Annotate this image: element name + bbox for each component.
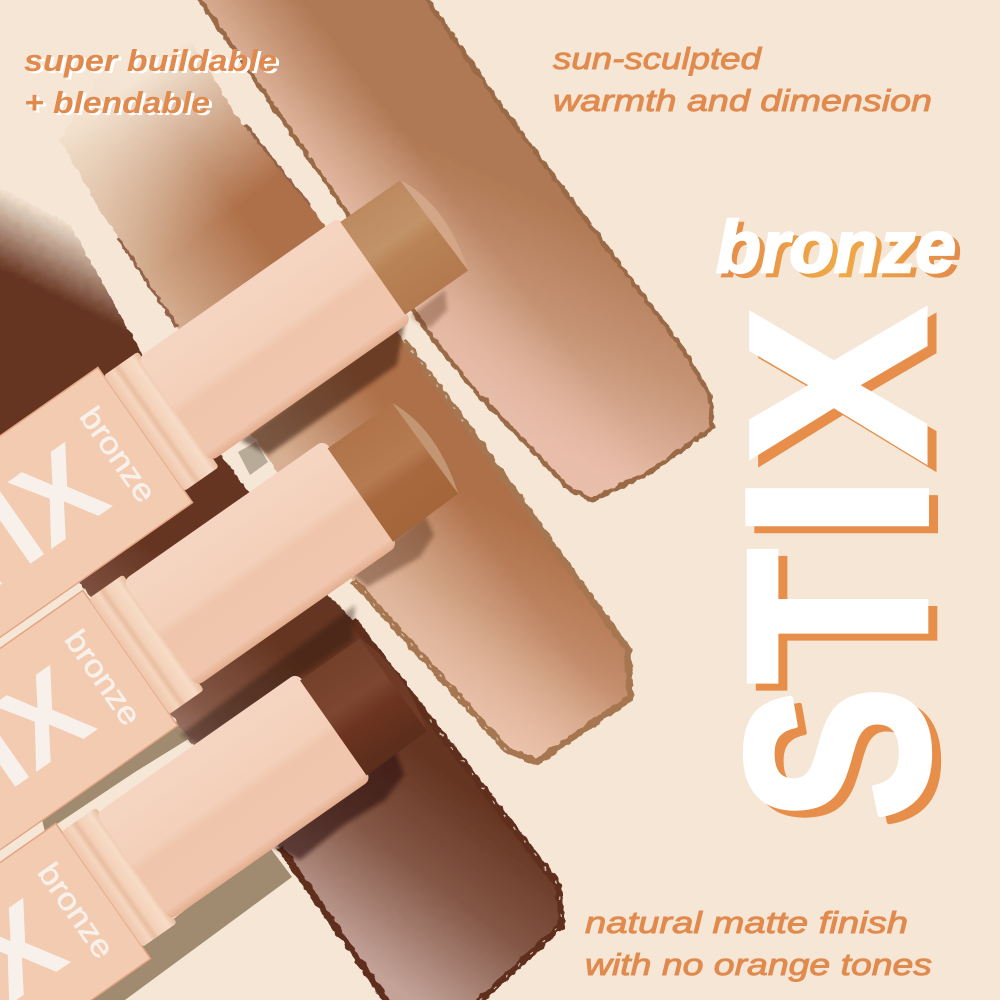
collar (104, 352, 219, 491)
caption: super buildable + blendable: super buildable (27, 45, 280, 80)
heading: STIX vertical (688, 308, 995, 828)
product: medium bronze stick (0, 377, 483, 980)
caption: super buildable + blendable: + blendable (24, 85, 210, 120)
base (0, 823, 150, 1000)
bronze print: bronze (31, 856, 121, 965)
bronze print: bronze (73, 400, 163, 509)
shadows cast by the sticks (35, 290, 447, 1000)
heading: STIX vertical: S (692, 686, 983, 821)
swatch: deep bronze smear (0, 180, 562, 1000)
heading: STIX vertical: T (701, 555, 992, 692)
caption: sun-sculpted warmth and dimension: sun-sculpted (553, 41, 763, 76)
caption: natural matte finish with no orange tones (585, 905, 932, 982)
bullet dome (360, 633, 434, 732)
body (96, 673, 372, 920)
heading: STIX vertical: I (688, 470, 986, 544)
body (123, 440, 398, 687)
bullet (300, 637, 428, 776)
heading: STIX vertical: T (692, 548, 983, 685)
caption: natural matte finish with no orange tones: natural matte finish (585, 905, 908, 940)
bullet dome (392, 396, 466, 495)
heading: STIX vertical: X (698, 308, 979, 463)
heading: bronze: bronze (716, 207, 956, 288)
heading: bronze: bronze (721, 211, 961, 292)
bullet (340, 178, 468, 315)
collar (62, 808, 177, 947)
caption: sun-sculpted warmth and dimension (553, 41, 932, 118)
caption: super buildable + blendable: + blendable (27, 87, 213, 122)
body (138, 217, 412, 462)
bullet dome (400, 173, 476, 273)
swatch: light bronze smear (193, 0, 712, 500)
heading: STIX vertical: X (707, 315, 988, 470)
heading: STIX vertical: I (697, 477, 995, 551)
caption: super buildable + blendable (24, 43, 280, 122)
swatch: medium bronze smear (60, 40, 630, 762)
caption: sun-sculpted warmth and dimension: warmth and dimension (553, 83, 932, 118)
bronze print: bronze (58, 623, 148, 732)
heading: STIX vertical: S (701, 693, 992, 828)
caption: super buildable + blendable: super buildable (24, 43, 277, 78)
bullet (328, 402, 459, 542)
caption: natural matte finish with no orange tones: with no orange tones (585, 947, 932, 982)
product: light bronze stick (0, 156, 494, 757)
base (0, 590, 177, 980)
product: deep bronze stick (0, 614, 450, 1000)
base (0, 367, 192, 757)
collar (89, 575, 204, 714)
